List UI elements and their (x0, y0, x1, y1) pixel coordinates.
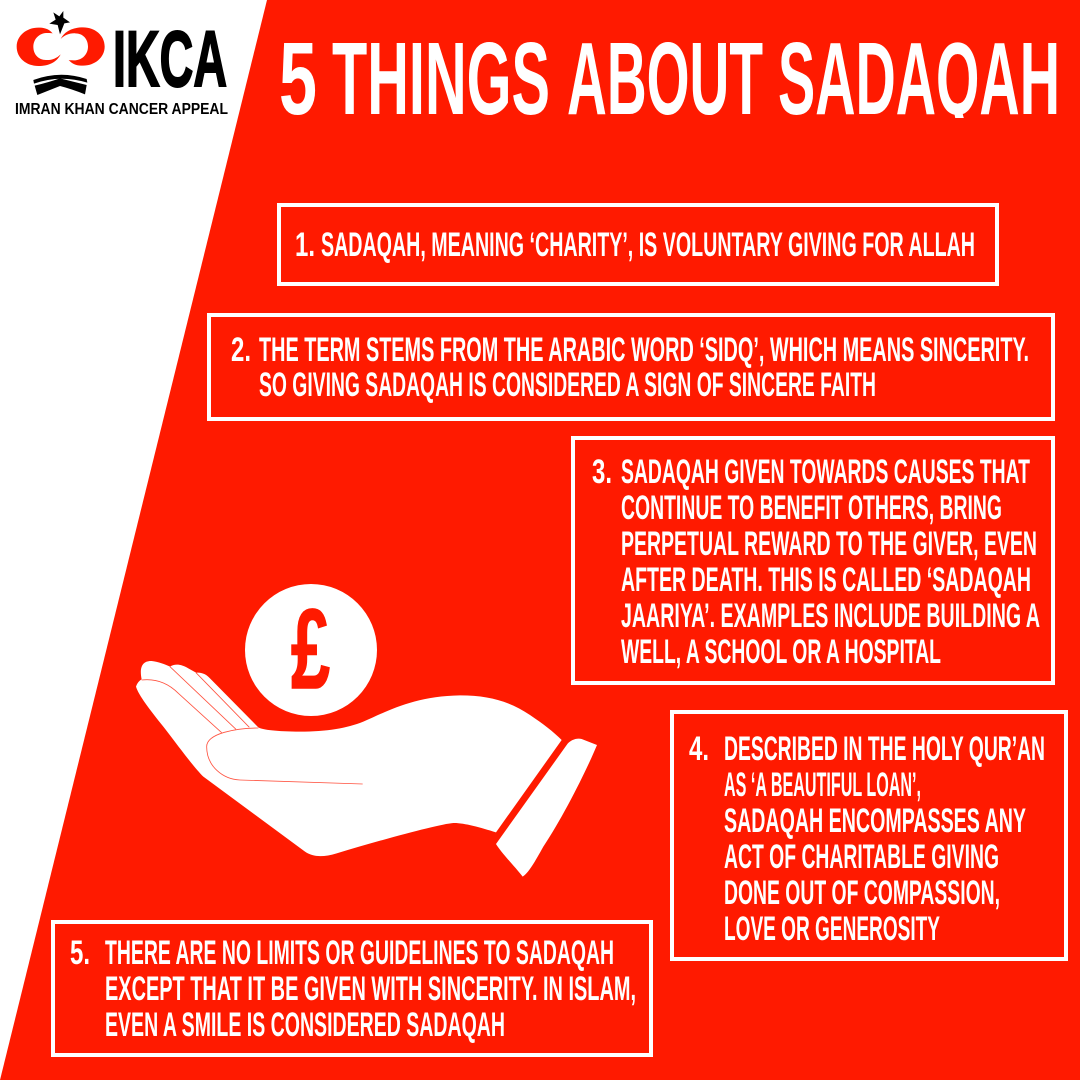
panel: point 5: EXCEPT THAT IT BE GIVEN WITH SINCERITY. IN ISLAM, (105, 970, 636, 1008)
panel: point 3 (573, 438, 1053, 683)
title: THINGS (332, 21, 550, 136)
panel: point 2: 2. (231, 331, 251, 369)
title (281, 42, 1056, 118)
title: ABOUT (567, 21, 763, 136)
logo: IKCA (15, 11, 228, 118)
panel: point 1: 1. (295, 226, 315, 264)
icon: hand holding pound coin (136, 584, 597, 877)
panel: point 2 (209, 315, 1053, 419)
panel: point 1 (279, 205, 997, 284)
logo: IKCA: IKCA (113, 14, 227, 103)
logo: IKCA: IMRAN KHAN CANCER APPEAL (15, 101, 228, 118)
title: 5 (279, 21, 317, 136)
panel: point 5: EVEN A SMILE IS CONSIDERED SADAQAH (105, 1006, 505, 1044)
panel: point 3: 3. (592, 453, 612, 491)
panel: point 5: 5. (70, 934, 90, 972)
icon: hand holding pound coin: £ (291, 586, 330, 712)
panel: point 5 (53, 922, 651, 1055)
panel: point 5: THERE ARE NO LIMITS OR GUIDELINES TO SADAQAH (105, 934, 614, 972)
panel: point 4 (672, 712, 1066, 959)
panel: point 4: 4. (689, 730, 709, 768)
